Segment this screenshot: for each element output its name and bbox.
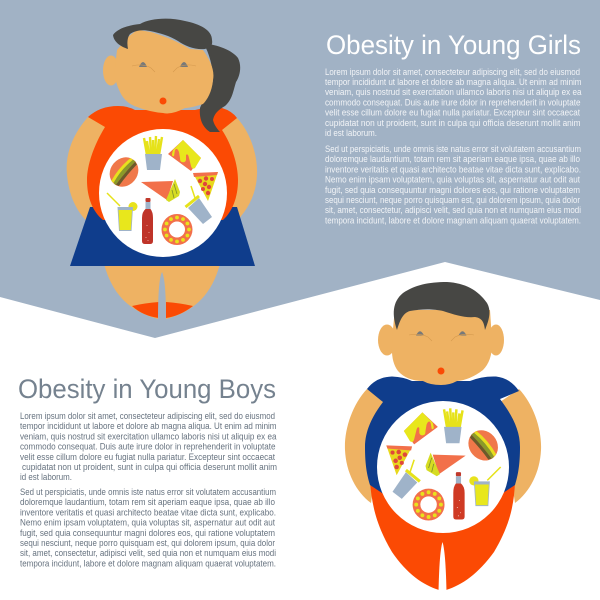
- text block: boys paragraph 2: sit, amet, consectetur, adipisci velit, sed quia non et numquam eius modi: [20, 548, 276, 558]
- text block: girls paragraph 1: tempor incididunt ut labore et dolore ab magna aliqua. Ut enim ad minim: [325, 77, 582, 87]
- text block: girls paragraph 1: id est laborum.: [325, 128, 377, 138]
- boy trousers: [370, 482, 515, 590]
- icon: pizza: [193, 172, 218, 201]
- text block: boys paragraph 1: id est laborum.: [20, 472, 72, 482]
- text block: boys paragraph 2: Nemo enim ipsam voluptatem, quia voluptas sit, aspernatur aut odit aut: [20, 518, 276, 528]
- text block: boys paragraph 2: doloremque laudantium, totam rem sit aperiam eaque ipsa, quae ab illo: [20, 497, 275, 507]
- text block: boys paragraph 1: Lorem ipsum dolor sit amet, consecteteur adipiscing elit, sed do eiusmod: [20, 411, 275, 421]
- icon: cake: [404, 412, 438, 444]
- text block: boys paragraph 1: velit esse cillum dolore eu fugiat nulla pariatur. Excepteur sint occaecat: [20, 452, 276, 462]
- icon: cake: [168, 140, 201, 171]
- girl skirt: [70, 207, 255, 266]
- text block: boys paragraph 2: fugit, sed quia consequuntur magni dolores eos, qui ratione voluptatem: [20, 528, 275, 538]
- title: boys: Obesity in Young Boys: [18, 374, 276, 404]
- icon: pizza: [386, 445, 412, 475]
- icon: burger: [462, 424, 504, 467]
- figure: obese girl: [67, 19, 257, 319]
- icon: fries: [444, 408, 463, 443]
- icon: takeaway cup: [393, 460, 420, 499]
- gap between trouser legs: [438, 542, 446, 592]
- girl ear: [103, 56, 119, 86]
- girl shoes: [132, 302, 193, 318]
- text block: girls paragraph 2: inventore veritatis et quasi architecto beatae vitae dicta sunt, explicabo.: [325, 164, 581, 174]
- icon: soda bottle: [453, 472, 465, 520]
- girl eyes: [132, 62, 196, 72]
- text block: girls paragraph 2: tempora incidunt, labore et dolore magnam aliquam quaerat voluptatem.: [325, 215, 581, 225]
- text block: girls paragraph 2: [325, 144, 581, 225]
- girl mouth: [160, 98, 166, 104]
- boy eyes: [409, 331, 474, 341]
- text block: boys paragraph 1: commodo consequat. Duis aute irure dolor in reprehenderit in voluptate: [20, 442, 276, 452]
- text block: girls paragraph 1: [325, 67, 582, 138]
- text block: boys paragraph 2: [20, 487, 276, 568]
- text block: boys paragraph 2: tempora incidunt, labore et dolore magnam aliquam quaerat voluptatem.: [20, 558, 276, 568]
- icon: donut: [162, 214, 192, 245]
- girl shirt: [87, 106, 238, 220]
- girl hair top: [113, 19, 212, 49]
- icon: burger: [104, 151, 144, 193]
- text block: girls paragraph 2: Nemo enim ipsam voluptatem, quia voluptas sit, aspernatur aut odit aut: [325, 175, 581, 185]
- text block: boys paragraph 1: veniam, quis nostrud sit exercitation ullamco laboris nisi ut aliquip ex ea: [20, 431, 277, 441]
- title: girls: Obesity in Young Girls: [326, 30, 581, 60]
- text block: girls paragraph 1: commodo consequat. Duis aute irure dolor in reprehenderit in voluptate: [325, 97, 581, 107]
- icon: cone: [425, 453, 466, 476]
- white lower background panel: [0, 262, 600, 600]
- icon: soda bottle: [142, 198, 153, 244]
- boy hair: [394, 282, 489, 330]
- boy food set: [386, 408, 504, 521]
- text block: boys paragraph 1: [20, 411, 277, 482]
- girl arms: [67, 117, 257, 224]
- girl plate: [99, 129, 227, 257]
- icon: takeaway cup: [186, 186, 212, 224]
- boy ears: [378, 324, 504, 356]
- figure: obese boy: [345, 282, 541, 592]
- gap between legs: [158, 272, 166, 319]
- icon: fries: [144, 136, 162, 170]
- icon: cone: [141, 179, 180, 202]
- text block: girls paragraph 1: cupidatat non ut proident, sunt in culpa qui officia deserunt mollit anim: [325, 118, 580, 128]
- boy arms: [345, 389, 541, 503]
- girl face: [115, 30, 213, 113]
- icon: lemonade glass: [469, 467, 501, 506]
- icon: lemonade glass: [107, 193, 138, 231]
- icon: donut: [413, 489, 445, 521]
- girl food set: [104, 136, 218, 245]
- boy face: [392, 310, 492, 385]
- text block: girls paragraph 1: veniam, quis nostrud sit exercitation ullamco laboris nisi ut aliquip ex ea: [325, 87, 582, 97]
- text block: girls paragraph 2: doloremque laudantium, totam rem sit aperiam eaque ipsa, quae ab illo: [325, 154, 580, 164]
- text block: girls paragraph 1: velit esse cillum dolore eu fugiat nulla pariatur. Excepteur sint occaecat: [325, 108, 581, 118]
- text block: boys paragraph 2: sequi nesciunt, neque porro quisquam est, qui dolorem ipsum, quia dolor: [20, 538, 275, 548]
- text block: boys paragraph 1: cupidatat non ut proident, sunt in culpa qui officia deserunt mollit anim: [22, 462, 277, 472]
- girl legs: [104, 264, 220, 319]
- boy mouth: [438, 368, 444, 374]
- text block: boys paragraph 1: tempor incididunt ut labore et dolore ab magna aliqua. Ut enim ad minim: [20, 421, 276, 431]
- boy shirt: [365, 376, 520, 495]
- text block: girls paragraph 2: sit, amet, consectetur, adipisci velit, sed quia non et numquam eius modi: [325, 205, 581, 215]
- text block: boys paragraph 2: Sed ut perspiciatis, unde omnis iste natus error sit volutatem accusantium: [20, 487, 276, 497]
- text block: boys paragraph 2: inventore veritatis et quasi architecto beatae vitae dicta sunt, explicabo.: [20, 507, 276, 517]
- girl hair lock: [200, 43, 240, 132]
- boy plate: [377, 401, 509, 533]
- text block: girls paragraph 2: fugit, sed quia consequuntur magni dolores eos, qui ratione voluptatem: [325, 185, 580, 195]
